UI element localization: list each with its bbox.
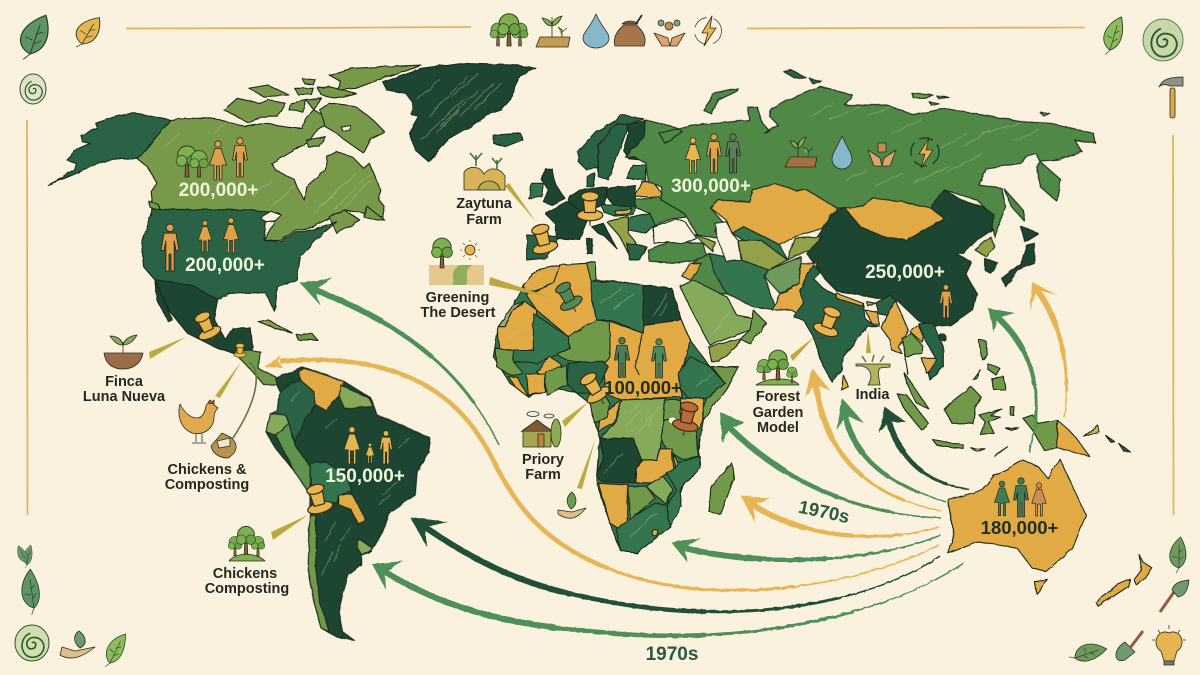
Black Sea (653, 218, 697, 244)
India and Southeast Asia (793, 265, 946, 430)
Saudi Arabia (680, 280, 753, 345)
Hainan (939, 334, 946, 341)
icon: compost sack (614, 15, 645, 46)
stat: USA 200,000+: 200,000+ (185, 255, 265, 276)
pin: Mexico (190, 308, 225, 347)
Kenya (680, 398, 703, 432)
Mongolia (845, 198, 944, 240)
Africa and Arabia (493, 262, 767, 553)
corner icons: bottom right (1067, 537, 1190, 669)
Guinea region (495, 348, 523, 375)
pin: India (810, 303, 846, 344)
Great Lakes (260, 212, 281, 222)
Greenland and Iceland (383, 63, 536, 162)
Caspian Sea (715, 222, 741, 262)
label: Finca Luna Nueva: Finca (105, 374, 143, 390)
Western Sahara (498, 302, 523, 327)
pin: Morocco (551, 278, 586, 318)
pin: Nigeria (575, 368, 615, 411)
icon: chicken (179, 400, 218, 443)
Chile (308, 515, 329, 632)
arrow: Australia to East Africa (720, 412, 941, 518)
Malay Peninsula (905, 373, 928, 408)
icon: spiral (20, 74, 46, 104)
Alaska (48, 113, 170, 185)
Tanzania (662, 420, 698, 460)
UK (542, 168, 565, 205)
arrow: Australia to Forest Garden (805, 368, 941, 511)
Zimbabwe (647, 477, 673, 503)
Europe (527, 115, 687, 260)
Java and islands (933, 407, 1019, 456)
icon: leaf (1067, 636, 1108, 669)
Japan and Sakhalin (1002, 188, 1038, 287)
Denmark (587, 173, 595, 187)
Cuba and Caribbean (258, 320, 318, 340)
icon: leaf (15, 569, 46, 616)
world map (48, 63, 1152, 640)
label: India: India (856, 387, 890, 403)
Mozambique (667, 457, 700, 527)
icon: trowel (1116, 631, 1143, 661)
icon: trees (490, 14, 528, 46)
France (545, 202, 587, 240)
Iraq (690, 253, 726, 293)
icon: Forest Garden Model (756, 350, 799, 385)
Afghanistan (765, 257, 801, 293)
Bhutan (867, 302, 876, 305)
icons: Russia resources row (785, 136, 939, 169)
Colombia (270, 378, 316, 442)
Kazakhstan (711, 183, 837, 245)
Cameroon (590, 393, 610, 423)
label: Chickens and Composting: Composting (165, 477, 249, 493)
label: Chickens Composting: Chickens (213, 566, 277, 582)
Peru (276, 423, 310, 495)
Syria and Jordan (682, 263, 701, 280)
Ecuador (266, 413, 289, 435)
stat: China 250,000+: 250,000+ (865, 262, 945, 283)
Russia (625, 70, 1096, 238)
icon: hands and people (654, 20, 685, 46)
China (807, 190, 994, 327)
South America (233, 350, 431, 640)
icon: India tree (856, 355, 890, 385)
Bolivia (310, 462, 352, 503)
label: Zaytuna Farm: Zaytuna (456, 196, 512, 212)
Poland (607, 185, 637, 207)
Laos (910, 325, 923, 342)
Canada (138, 65, 421, 240)
Burkina Faso (537, 357, 562, 375)
icon: Zaytuna farm hills (464, 153, 505, 190)
label: Chickens and Composting: Chickens & (168, 462, 246, 478)
arrow: long green to southern South America (372, 561, 964, 636)
Lake Victoria (669, 417, 676, 424)
Mauritania (497, 302, 537, 350)
Ukraine (635, 197, 687, 227)
Norway (578, 115, 643, 170)
Uganda (663, 400, 680, 420)
Guyanas (339, 385, 373, 408)
India (793, 265, 880, 382)
arrow: long yellow to Central America (264, 355, 939, 590)
arrow: green to North America (300, 278, 499, 445)
Algeria (527, 263, 597, 337)
Sumatra (897, 393, 928, 430)
migration arrows from Australia (264, 278, 1066, 636)
Romania (628, 213, 655, 233)
Namibia (598, 483, 628, 532)
icon: Priory Farm (521, 412, 561, 447)
Gabon and Congo (598, 400, 622, 432)
Morocco (523, 265, 560, 293)
Balkans (607, 217, 637, 253)
Egypt (643, 285, 682, 325)
people icons: Brazil (344, 427, 392, 464)
Oceania and Madagascar (709, 340, 1152, 606)
corner icons: top right (1102, 15, 1183, 118)
Libya (592, 282, 643, 333)
icon: leaf (103, 630, 128, 670)
Malawi (673, 453, 682, 480)
people icons: USA (161, 218, 239, 271)
icon: water drop (583, 14, 609, 48)
South Africa (617, 503, 670, 553)
icon: lightbulb (1152, 625, 1186, 665)
Tasmania (1034, 580, 1048, 593)
Vietnam (918, 323, 943, 380)
Mexico (155, 280, 253, 358)
corner icons: top left (19, 13, 102, 104)
Sardinia (587, 238, 592, 253)
Ethiopia (678, 357, 725, 398)
Venezuela (299, 368, 344, 410)
label: Forest Garden Model: Forest (756, 389, 800, 405)
Iran (709, 253, 776, 310)
map pins (190, 192, 846, 521)
icon: spiral (15, 625, 49, 661)
Australia (948, 458, 1086, 572)
NE India (877, 295, 897, 315)
label: Forest Garden Model: Garden (753, 405, 803, 421)
arrow: Australia to South Africa (671, 535, 941, 563)
Finland (623, 120, 653, 160)
leader beams from icons to pins (149, 183, 871, 540)
date label: 1970s on arrow: 1970s (797, 496, 851, 527)
Mali (513, 313, 570, 363)
icon: Finca Luna Nueva seedling bowl (104, 335, 143, 369)
USA (142, 209, 337, 312)
stat: South America 150,000+: 150,000+ (325, 466, 405, 487)
icon: yellow leaf (73, 13, 102, 52)
Philippines (973, 340, 1006, 390)
Borneo (944, 387, 981, 423)
Zambia (635, 448, 673, 483)
stat: Russia 300,000+: 300,000+ (671, 176, 751, 197)
Ghana region (545, 365, 567, 395)
label: Finca Luna Nueva: Luna Nueva (83, 389, 166, 405)
pin: Central America (234, 343, 246, 360)
Lesotho (652, 530, 658, 536)
people icons: Canada (176, 138, 248, 180)
Botswana (628, 487, 655, 520)
Nepal (837, 293, 863, 306)
header icon row (490, 14, 722, 48)
arrow: green to East Asia (988, 308, 1036, 452)
icon: seedling tray (536, 16, 570, 47)
Africa base (493, 263, 737, 553)
people icons: Africa (614, 337, 666, 378)
Chad Sudan border (635, 333, 643, 375)
Liberia (508, 377, 528, 397)
icon: shovel (1160, 580, 1189, 612)
label: Greening The Desert: Greening (426, 290, 489, 306)
icon: leaf (1102, 15, 1124, 56)
label: Chickens Composting: Composting (205, 581, 289, 597)
DR Congo (600, 398, 665, 460)
arrow: Australia to India (879, 407, 969, 489)
label: Forest Garden Model: Model (757, 420, 799, 436)
Nigeria (567, 362, 608, 393)
Caucasus (696, 235, 715, 252)
people icons: Australia (995, 478, 1046, 517)
icon: renewable energy (694, 16, 722, 46)
arrow: 1970s yellow to Madagascar (741, 496, 939, 536)
icon: Greening the Desert (429, 238, 484, 285)
icon: hammer (1159, 77, 1183, 118)
icon: compost bag (211, 433, 236, 458)
label: Priory Farm: Farm (525, 467, 561, 483)
icon: leaf (19, 13, 49, 61)
Central Europe (602, 205, 637, 217)
Russia and Asia (625, 70, 1096, 327)
Myanmar (882, 302, 908, 353)
arrow: long dark to South America (410, 517, 940, 612)
Somalia (700, 367, 738, 420)
top border lines and side rules (27, 27, 1174, 515)
icon: sprig (13, 545, 33, 568)
arrow: yellow to Japan (1030, 282, 1066, 418)
date label: 1970s bottom: 1970s (646, 644, 698, 665)
Central Asia (732, 227, 822, 270)
Sulawesi (979, 409, 1002, 435)
Turkey (648, 242, 707, 263)
Bangladesh (865, 310, 880, 325)
Baltics (627, 165, 647, 180)
stat: Australia 180,000+: 180,000+ (981, 517, 1059, 538)
Belarus (635, 180, 662, 197)
icon: spiral (1143, 19, 1183, 61)
Central America (233, 350, 279, 385)
pin: Germany (577, 192, 603, 226)
Ireland (528, 183, 543, 198)
Ivory Coast (527, 373, 545, 395)
Paraguay (339, 494, 365, 523)
Oman (740, 310, 767, 343)
New Guinea (1023, 415, 1130, 457)
Cambodia (922, 358, 937, 373)
pin: Iberia (527, 222, 560, 261)
stat: Canada 200,000+: 200,000+ (179, 180, 258, 201)
North America (48, 65, 421, 358)
corner icons: bottom left (13, 545, 128, 670)
Iberia (527, 235, 560, 260)
icon: hand with leaf (558, 492, 586, 518)
icon: hand with leaves (60, 631, 95, 658)
Chad and Sudan (603, 320, 690, 400)
people icons: Russia (685, 134, 740, 173)
Greece (627, 243, 647, 260)
icon: Chickens Composting trees (228, 526, 265, 561)
pin: Bolivia (302, 482, 335, 521)
stat: Africa 100,000+: 100,000+ (604, 377, 682, 398)
icon: oak leaf (1166, 537, 1190, 574)
pin: Kenya (670, 400, 703, 439)
Brazil and Argentina base (266, 367, 431, 640)
label: Priory Farm: Priory (522, 452, 564, 468)
Italy (592, 223, 617, 248)
Pakistan (772, 263, 818, 317)
Tunisia (587, 262, 597, 283)
label: Greening The Desert: The Desert (421, 305, 496, 321)
New Zealand (1096, 555, 1152, 606)
Angola (597, 438, 642, 483)
Niger (557, 320, 610, 367)
Yemen (708, 335, 747, 362)
label: Zaytuna Farm: Farm (466, 212, 502, 228)
Sweden (598, 123, 628, 180)
Thailand (902, 333, 923, 375)
Hungary (615, 208, 632, 215)
arrow: Australia to Sri Lanka (837, 398, 946, 502)
Madagascar (709, 463, 734, 515)
Sri Lanka (842, 375, 848, 390)
Korea (975, 237, 998, 273)
person icon: China (940, 285, 952, 318)
Uruguay (358, 538, 373, 555)
Benelux and Germany (568, 187, 607, 213)
